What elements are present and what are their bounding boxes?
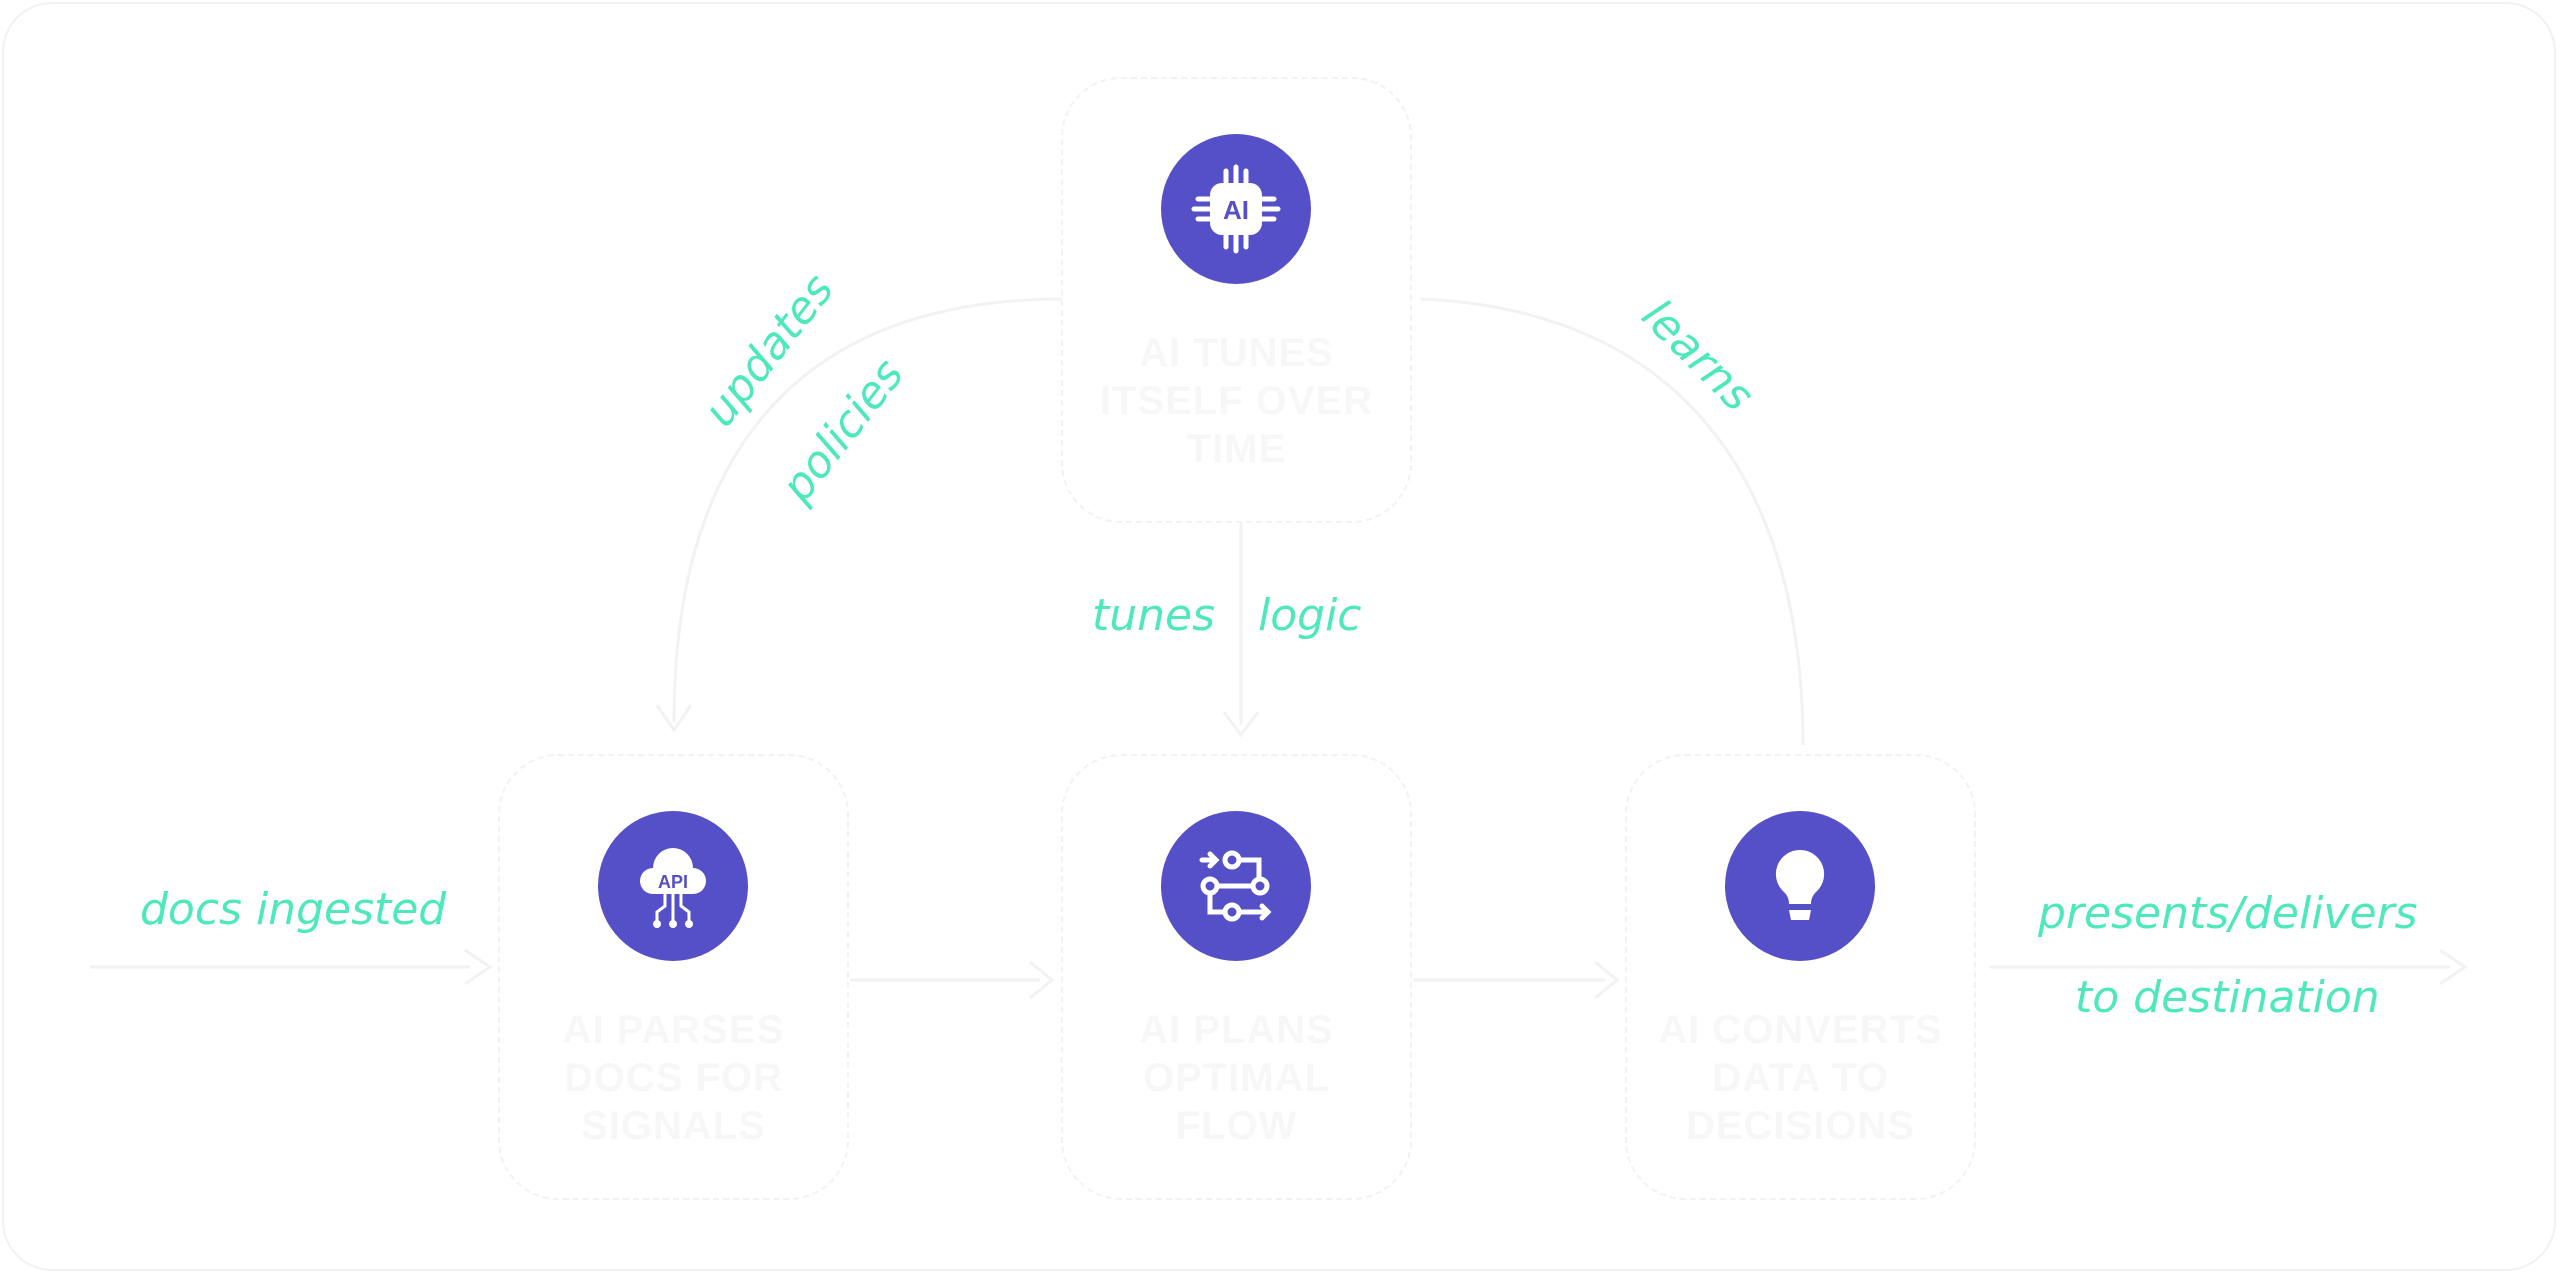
label: docs ingested: docs ingested (140, 884, 446, 935)
box: AI tunes itself over time (1061, 77, 1412, 523)
label: DOCS FOR (564, 1056, 783, 1100)
label (1063, 329, 1410, 473)
icon: AI chip: AI (1223, 195, 1249, 225)
label (1063, 1006, 1410, 1150)
icon: lightbulb (1725, 811, 1875, 961)
icon: AI chip (1161, 134, 1311, 284)
icon: flow (1161, 811, 1311, 961)
label: AI TUNES (1139, 331, 1334, 375)
label: TIME (1187, 427, 1286, 471)
label: AI PLANS (1139, 1008, 1334, 1052)
label: ITSELF OVER (1100, 379, 1373, 423)
label: AI PARSES (563, 1008, 784, 1052)
label: presents/delivers: presents/delivers (2038, 888, 2418, 939)
label: policies: policies (772, 350, 914, 511)
label: AI CONVERTS (1658, 1008, 1943, 1052)
label (1627, 1006, 1974, 1150)
label: FLOW (1176, 1104, 1297, 1148)
label: DATA TO (1712, 1056, 1889, 1100)
label: updates: updates (694, 265, 844, 436)
box: AI converts data (1625, 754, 1976, 1200)
box: AI plans optimal flow (1061, 754, 1412, 1200)
icon: API cloud: API (658, 872, 688, 892)
label: OPTIMAL (1143, 1056, 1330, 1100)
label: SIGNALS (581, 1104, 766, 1148)
label: tunes: tunes (1092, 590, 1215, 641)
label: logic: logic (1258, 590, 1362, 641)
label: DECISIONS (1686, 1104, 1915, 1148)
label (500, 1006, 847, 1150)
label: to destination: to destination (2075, 972, 2380, 1023)
icon: API cloud (598, 811, 748, 961)
label: learns: learns (1632, 290, 1763, 421)
box: AI parses docs (498, 754, 849, 1200)
